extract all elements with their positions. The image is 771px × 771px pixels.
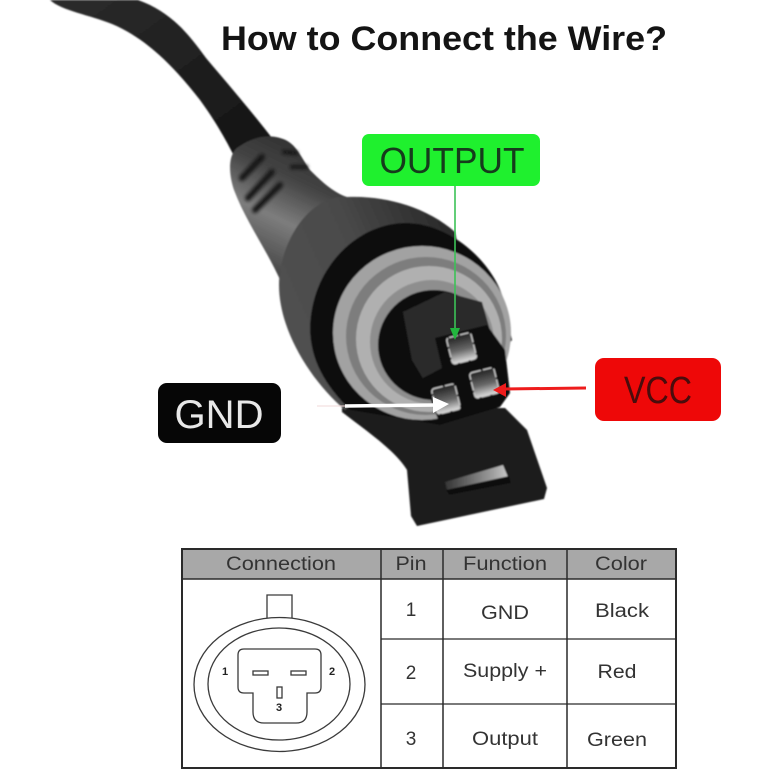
pinout table bbox=[182, 549, 676, 768]
pin gnd bbox=[431, 383, 461, 415]
arrow: VCC bbox=[493, 383, 586, 397]
OUTPUT label bbox=[362, 134, 540, 186]
arrow: output bbox=[450, 186, 460, 340]
pin output bbox=[446, 332, 477, 364]
latch window bbox=[445, 465, 511, 495]
black ring bbox=[310, 223, 512, 425]
row 1: 1 bbox=[406, 600, 416, 621]
OUTPUT label: OUTPUT bbox=[380, 140, 524, 181]
header labels: Pin bbox=[396, 554, 426, 575]
GND label: GND bbox=[174, 393, 264, 437]
row 2 bbox=[406, 661, 636, 684]
header labels: Connection bbox=[226, 554, 336, 575]
row 3 bbox=[406, 729, 647, 751]
row 2: 2 bbox=[406, 663, 416, 684]
connection diagram: 2 bbox=[329, 666, 335, 678]
row 3: Output bbox=[472, 729, 539, 750]
rear locking latch bbox=[342, 408, 547, 526]
boot grooves bbox=[242, 152, 306, 210]
row 3: 3 bbox=[406, 729, 416, 750]
header labels bbox=[226, 554, 648, 575]
plug body bbox=[403, 292, 490, 380]
header labels: Function bbox=[463, 554, 547, 575]
connection diagram bbox=[194, 595, 365, 752]
row 1: Black bbox=[595, 601, 650, 622]
grey seal rings bbox=[333, 246, 511, 420]
connection diagram: 1 bbox=[222, 666, 228, 678]
outer collar bbox=[279, 197, 470, 410]
cable bbox=[50, 0, 272, 160]
table header bbox=[182, 549, 676, 579]
strain relief boot bbox=[230, 136, 350, 284]
header labels: Color bbox=[595, 554, 648, 575]
row 2: Red bbox=[598, 662, 636, 683]
row 2: Supply + bbox=[463, 661, 547, 682]
VCC label: VCC bbox=[624, 370, 692, 412]
row 1 bbox=[406, 600, 650, 624]
GND label bbox=[158, 383, 281, 443]
arrow: GND bbox=[317, 397, 449, 413]
plug face bbox=[423, 325, 510, 425]
VCC label bbox=[595, 358, 721, 421]
pin vcc bbox=[469, 367, 500, 399]
row 1: GND bbox=[481, 603, 529, 624]
connector photo illustration bbox=[50, 0, 547, 526]
table grid bbox=[182, 549, 676, 768]
connection diagram: 3 bbox=[276, 702, 282, 714]
row 3: Green bbox=[587, 730, 647, 751]
title: How to Connect the Wire? bbox=[221, 20, 667, 58]
